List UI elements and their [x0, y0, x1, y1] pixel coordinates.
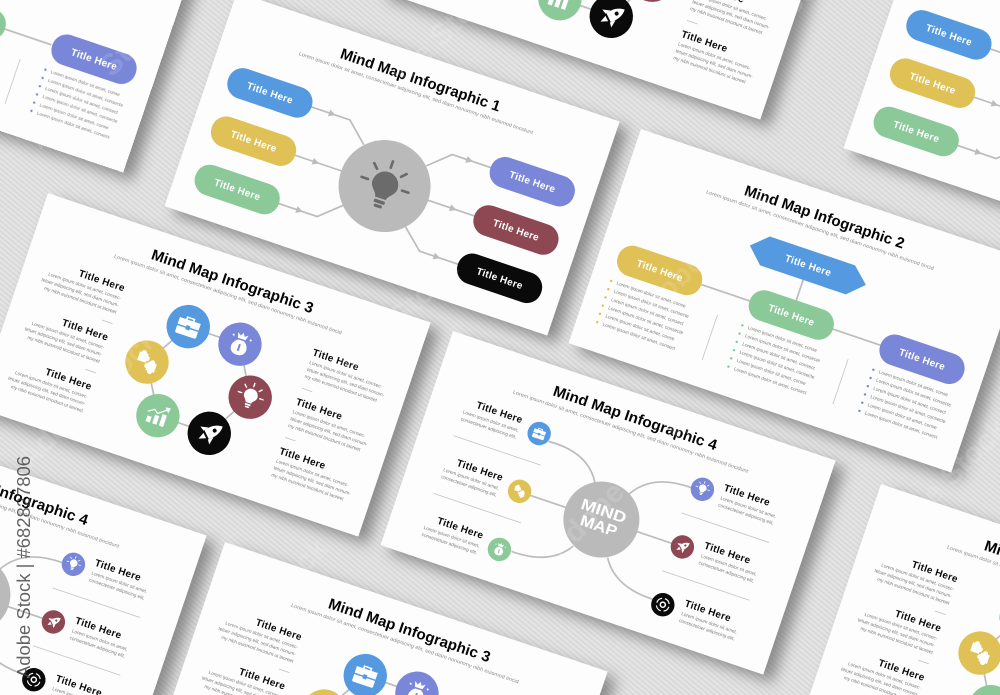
- purple bullet list: Lorem ipsum dolor sit amet, conse: [50, 69, 121, 98]
- right text block 2: Title Here: [294, 397, 344, 423]
- watermarks: Adobe Stock: [622, 182, 775, 335]
- left text block 3: Lorem ipsum dolor sit amet, consec-: [14, 370, 89, 400]
- icon: puzzle: [505, 476, 534, 506]
- bullet list: yellow: Lorem ipsum dolor sit amet, conse: [604, 314, 676, 343]
- left text block 3: Title Here: [877, 658, 926, 684]
- title: Mind Map Infographic 4: [551, 383, 720, 454]
- bullet list: yellow: Lorem ipsum dolor sit amet, consect: [610, 297, 685, 327]
- blue pill: [902, 6, 996, 64]
- right text block 1: consectetuer adipiscing elit,: [717, 502, 774, 527]
- icon: green chart: [532, 0, 587, 26]
- blue pill: Title Here: [924, 23, 974, 49]
- green pill: [870, 103, 963, 160]
- left text block 3: Title Here: [44, 367, 93, 393]
- icon: puzzle: [120, 335, 175, 390]
- watermarks: Adobe Stock: [22, 2, 175, 155]
- right text block 2: consectetuer adipiscing elit,: [69, 635, 126, 660]
- left text block 3: tetuer adipiscing elit, sed diam nonum-: [7, 375, 87, 407]
- watermarks: Adobe Stock: [12, 322, 165, 475]
- left text block 2: [22, 307, 110, 365]
- icon: black rocket: [584, 0, 639, 44]
- left text block 1: Title Here: [475, 400, 524, 426]
- hub fragment: [0, 546, 21, 643]
- right text block 2: [69, 616, 133, 660]
- bullet list: yellow: Lorem ipsum dolor sit amet, consecte: [607, 305, 684, 336]
- left text block 3: my nibh euismod tincidunt ut laoreet: [10, 384, 84, 414]
- pill: yellow: [613, 242, 706, 299]
- purple bullet list: Lorem ipsum dolor sit amet, consect: [44, 86, 119, 116]
- right text block 1: Lorem ipsum dolor sit amet,: [719, 496, 777, 520]
- left text block 1: tetuer adipiscing elit, sed diam nonum-: [41, 277, 120, 309]
- bullet list: yellow: Lorem ipsum dolor sit amet, consect: [602, 322, 677, 352]
- icon: gear: [19, 665, 49, 695]
- right text block 3: tetuer adipiscing elit, sed diam nonum-: [273, 465, 352, 497]
- bullet list: green: Lorem ipsum dolor sit amet, consecte: [739, 350, 816, 381]
- left text block 2: [199, 656, 287, 695]
- slide: Mind Map Infographic 2: [569, 129, 1000, 473]
- bullet list: green: Lorem ipsum dolor sit amet, conse: [736, 358, 807, 387]
- bullet list: green: Lorem ipsum dolor sit amet, consect: [733, 366, 808, 397]
- bullet list: purple: [857, 367, 955, 442]
- left text block 3: Lorem ipsum dolor sit amet,: [423, 525, 480, 549]
- text block: my nibh euismod tincidunt ut laoreet: [689, 6, 764, 36]
- bullet list: yellow: [595, 278, 693, 353]
- right text block 3: consectetuer adipiscing elit,: [678, 618, 735, 642]
- pill: purple: [486, 153, 579, 210]
- left text block 1: Title Here: [77, 268, 126, 294]
- left text block 1: [215, 607, 304, 665]
- pill: yellow: [207, 112, 300, 170]
- right text block 1: Title Here: [311, 348, 360, 374]
- text block: tetuer adipiscing elit, sed diam nonum-: [691, 0, 771, 31]
- subtitle: Lorem ipsum dolor sit amet, consectetuer adipiscing elit, sed diam nonummy nibh euismod tincidunt: [298, 51, 534, 136]
- left text block 1: Lorem ipsum dolor sit amet, consec-: [880, 563, 955, 593]
- bullet list: purple: Lorem ipsum dolor sit amet, consecte: [875, 378, 952, 409]
- pill: purple: Title Here: [507, 170, 557, 196]
- pill: green: [191, 161, 284, 218]
- icon: bulb: [688, 474, 717, 504]
- purple bullet list: Lorem ipsum dolor sit amet, consecte: [42, 94, 119, 125]
- left text block 2: Lorem ipsum dolor sit amet, consec-: [864, 612, 939, 642]
- purple bullet list: Lorem ipsum dolor sit amet, consect: [36, 111, 111, 141]
- text block: Title Here: [680, 29, 729, 55]
- purple bullet list: Lorem ipsum dolor sit amet, conse: [39, 102, 110, 131]
- right text block 2: Lorem ipsum dolor sit amet, consec-: [292, 409, 367, 440]
- icon: green circle: [963, 679, 1000, 695]
- icon: rocket: [39, 607, 68, 637]
- left text block 1: consectetuer adipiscing elit,: [460, 416, 517, 441]
- purple bullet list: Lorem ipsum dolor sit amet, consecte: [47, 78, 124, 109]
- left text block 1: Title Here: [910, 559, 959, 585]
- pill: green: [745, 286, 838, 344]
- pill: maroon: Title Here: [491, 218, 541, 244]
- left text block 2: tetuer adipiscing elit, sed diam nonum-: [24, 326, 103, 358]
- icon: blue circle: [994, 590, 1000, 645]
- left text block 1: tetuer adipiscing elit, sed diam nonum-: [874, 568, 953, 600]
- bullet list: purple: Lorem ipsum dolor sit amet, consect: [872, 386, 947, 416]
- left text block 2: [855, 598, 943, 656]
- left text block 1: my nibh euismod tincidunt ut laoreet: [876, 577, 951, 607]
- title: Mind Map Infographic 1: [338, 45, 503, 115]
- pill: green: Title Here: [767, 303, 816, 329]
- right text block 2: tetuer adipiscing elit, sed diam nonum-: [289, 416, 369, 448]
- right text block 2: [287, 397, 375, 455]
- bullet list: yellow: Lorem ipsum dolor sit amet, consecte: [613, 289, 690, 320]
- left text block 2: my nibh euismod tincidunt ut laoreet: [27, 335, 101, 365]
- right text block 3: Lorem ipsum dolor sit amet, consec-: [275, 458, 350, 489]
- left text block 2: tetuer adipiscing elit, sed diam nonum-: [857, 617, 936, 649]
- bullet list: green: Lorem ipsum dolor sit amet, consecte: [744, 333, 821, 364]
- right text block 1: Lorem ipsum dolor sit amet,: [90, 571, 148, 595]
- left text block 2: consectetuer adipiscing elit,: [440, 474, 497, 498]
- bullet list: green: [726, 323, 824, 397]
- bullet list: purple: Lorem ipsum dolor sit amet, consecte: [870, 394, 947, 425]
- right text block 2: consectetuer adipiscing elit,: [698, 560, 755, 585]
- bullet list: green: Lorem ipsum dolor sit amet, consect: [741, 342, 816, 372]
- right text block 1: Title Here: [722, 483, 772, 509]
- icon: puzzle: [953, 626, 1000, 681]
- hub with lightbulb: [326, 128, 443, 244]
- watermarks: Adobe Stock: [312, 252, 465, 405]
- hub: mind map: [553, 471, 650, 568]
- pill: black: Title Here: [475, 266, 524, 292]
- right text block 3: Title Here: [683, 599, 732, 624]
- title: Mind Map Infographic 2: [742, 182, 907, 252]
- left text block 2: Lorem ipsum dolor sit amet, consec-: [31, 321, 106, 351]
- pill: blue: Title Here: [245, 81, 295, 107]
- pill: yellow: Title Here: [635, 258, 684, 284]
- hub: mind map: MIND: [579, 496, 629, 527]
- icon: money bag: [212, 317, 267, 372]
- purple pill: Title Here: [69, 47, 119, 73]
- slide: top-center partial Infographic 3: [378, 0, 833, 120]
- pill: yellow: Title Here: [229, 129, 278, 155]
- slide: top-left partial Infographic 2: [0, 0, 196, 173]
- pill: blue: [223, 64, 317, 122]
- stock id caption: Adobe Stock | #682827806: [13, 456, 34, 678]
- right text block 3: my nibh euismod tincidunt ut laoreet: [270, 472, 345, 503]
- left text block 2: Title Here: [60, 318, 110, 344]
- left text block 1: Lorem ipsum dolor sit amet, consec-: [47, 272, 122, 302]
- icon: yellow circle: [297, 684, 352, 695]
- icon: gear: [648, 590, 678, 620]
- right text block 1: consectetuer adipiscing elit,: [88, 577, 145, 602]
- right text block 3: [678, 599, 742, 642]
- green pill fragment: [0, 0, 10, 44]
- icon: bulb: [59, 549, 88, 579]
- watermarks: Adobe Stock: [542, 412, 695, 565]
- purple pill: [47, 30, 141, 88]
- right text block 2: Lorem ipsum dolor sit amet,: [71, 628, 128, 653]
- right text block 2: Lorem ipsum dolor sit amet,: [700, 553, 757, 578]
- left text block 1: my nibh euismod tincidunt ut laoreet: [220, 635, 295, 665]
- left text block 2: Lorem ipsum dolor sit amet,: [442, 467, 500, 492]
- left text block 3: Title Here: [435, 516, 485, 542]
- right text block 3: [270, 446, 359, 504]
- text block: tetuer adipiscing elit, sed diam nonum-: [675, 48, 754, 80]
- right text block 2: [698, 541, 762, 585]
- left text block 1: Title Here: [254, 617, 303, 643]
- left text block 2: Title Here: [893, 609, 943, 635]
- icon: briefcase: [161, 299, 216, 354]
- right text block 3: Lorem ipsum dolor sit amet,: [680, 611, 738, 636]
- icon: bulb: [223, 370, 278, 425]
- right text block 1: tetuer adipiscing elit, sed diam nonum-: [306, 367, 385, 399]
- bullet list: purple: Lorem ipsum dolor sit amet, conse: [867, 402, 938, 431]
- icon: briefcase: [524, 419, 554, 448]
- left text block 3: consectetuer adipiscing elit,: [421, 532, 478, 556]
- left text block 3: [838, 647, 926, 695]
- left text block 2: Title Here: [455, 458, 504, 484]
- bullet list: purple: Lorem ipsum dolor sit amet, conse: [878, 369, 949, 398]
- right text block 1: [717, 483, 781, 527]
- right text block 1: [88, 558, 152, 602]
- title: Mind Map Infographic 3: [149, 246, 316, 317]
- hexagon: blue top node: Title Here: [783, 253, 833, 279]
- slide: top-right partial Infographic 1: [844, 0, 1000, 278]
- slide: Mind Map Infographic 1: [165, 0, 620, 336]
- bullet list: yellow: Lorem ipsum dolor sit amet, conse: [616, 281, 687, 310]
- pill: green: Title Here: [212, 177, 262, 203]
- left text block 1: Lorem ipsum dolor sit amet, consec-: [224, 621, 299, 651]
- left text block 2: Title Here: [237, 667, 287, 693]
- left text block 3: [5, 356, 93, 414]
- right text block 1: Lorem ipsum dolor sit amet, consec-: [308, 360, 383, 390]
- subtitle: Lorem ipsum dolor sit amet, consectetuer adipiscing elit, sed diam nonummy nibh euismod tincid: [290, 603, 520, 685]
- right text block 1: my nibh euismod tincidunt ut laoreet: [304, 374, 378, 404]
- hub: mind map: MAP: [578, 512, 619, 541]
- pill: black: [453, 250, 546, 307]
- pill: purple: Title Here: [897, 347, 947, 373]
- icon: money bag: [389, 666, 444, 695]
- left text block 1: [460, 397, 524, 441]
- hexagon: blue top node: [745, 231, 871, 300]
- left text block 1: [38, 258, 127, 316]
- left text block 1: tetuer adipiscing elit, sed diam nonum-: [218, 626, 297, 658]
- left text block 3: Lorem ipsum dolor sit amet, consec-: [847, 661, 922, 691]
- watermarks: Adobe Stock: [182, 532, 335, 685]
- icon: rocket: [668, 532, 697, 562]
- curved connectors: [511, 440, 691, 599]
- right text block 2: Title Here: [703, 541, 752, 567]
- text block: my nibh euismod tincidunt ut laoreet: [672, 55, 747, 86]
- slide: bottom-left partial Infographic 4: [0, 406, 207, 695]
- text block: Lorem ipsum dolor sit amet, consec-: [677, 41, 752, 72]
- left text block 3: [420, 512, 485, 556]
- title: Mind Map Infographic 3: [326, 595, 493, 666]
- slide: bottom-right partial Infographic 3: [809, 484, 1000, 695]
- left text block 2: my nibh euismod tincidunt ut laoreet: [860, 626, 934, 656]
- bullet list: green: Lorem ipsum dolor sit amet, conse: [747, 325, 818, 354]
- slide: Mind Map Infographic 4: [381, 331, 836, 675]
- right text block 1: Title Here: [93, 558, 143, 584]
- left text block 1: Lorem ipsum dolor sit amet,: [462, 409, 519, 434]
- icon: briefcase: [338, 648, 393, 695]
- green pill: Title Here: [891, 119, 941, 145]
- yellow pill: [886, 54, 979, 112]
- right text block 3: Title Here: [278, 446, 327, 472]
- icon: chart: [130, 388, 185, 443]
- icon: maroon circle: [625, 0, 680, 8]
- icon: rocket: [182, 406, 237, 461]
- left text block 1: [871, 549, 960, 607]
- subtitle: Lorem ipsum dolor sit amet, consectetuer adipiscing elit, sed diam nonummy nibh euismod tincid: [705, 189, 935, 272]
- right text block 1: [304, 348, 392, 406]
- yellow pill: Title Here: [908, 71, 957, 97]
- left text block 2: [440, 455, 504, 499]
- right text block 2: Title Here: [74, 616, 123, 642]
- subtitle: Lorem ipsum dolor sit amet, consectetuer adipiscing elit, sed diam nonummy nibh euismod tincidunt: [512, 390, 749, 475]
- pill: maroon: [469, 201, 563, 259]
- bullet list: purple: Lorem ipsum dolor sit amet, consect: [864, 411, 939, 441]
- right text block 2: my nibh euismod tincidunt ut laoreet: [287, 423, 362, 453]
- icon: money bag: [485, 535, 514, 564]
- slide: bottom-center partial Infographic 3: [153, 542, 608, 695]
- pill: purple: [875, 330, 969, 388]
- text block: [672, 29, 761, 87]
- slide: Mind Map Infographic 3: [0, 193, 431, 537]
- connectors with arrows: [277, 104, 492, 268]
- subtitle: Lorem ipsum dolor sit amet, consectetuer adipiscing elit, sed diam nonummy nibh euismod tincid: [113, 254, 343, 336]
- left text block 1: my nibh euismod tincidunt ut laoreet: [43, 286, 118, 316]
- purple bullet list: [29, 67, 127, 142]
